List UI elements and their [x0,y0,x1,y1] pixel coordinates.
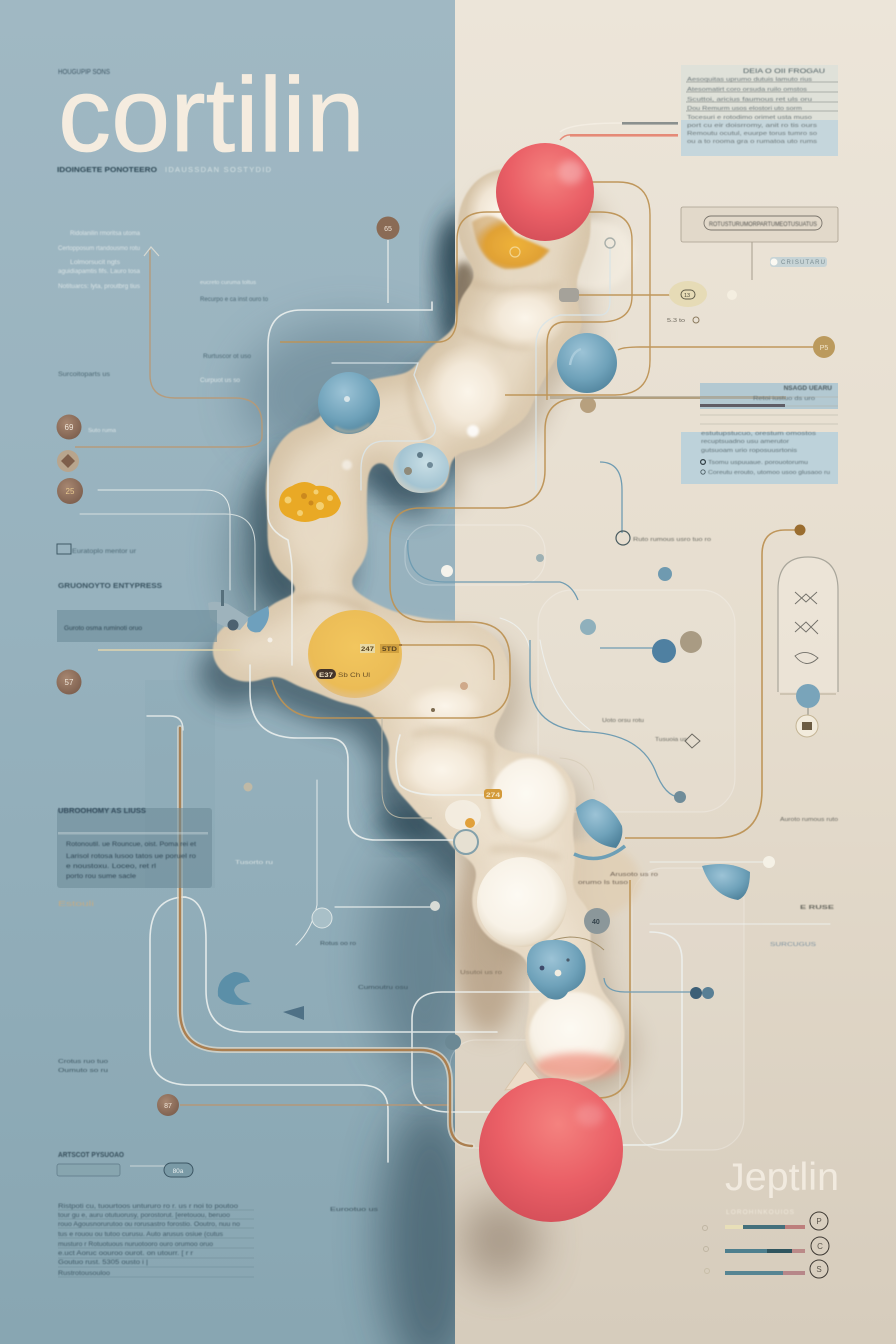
ball: large gold [308,610,402,698]
badge 3 [57,478,83,504]
small labels: right of centre: Oumuto so ru [58,1068,108,1074]
text block: left notes [58,231,269,555]
text block: left notes: eucreto curuma toltus [200,280,256,286]
central fold shadows [230,218,540,1344]
subtitle [57,165,272,174]
small labels: right of centre [58,537,838,1213]
arrow: upward tan arrow [144,247,159,256]
bar 3: S [816,1265,822,1274]
panel: right middle data card: Retoi iustuo ds uro [753,396,815,402]
panel: top right data card: Dou Remurm usos elostori uto sorm [687,106,803,112]
gold ball labels: Sb Ch Ul [338,672,371,679]
panel: lower left text block: ARTSCOT PYSUOAO [58,1152,125,1159]
thick copper pipe [147,716,472,1146]
badge 3: 25 [66,487,75,496]
panel: translucent note: Rotonoutil. ue Rouncue, oist. Poma rei et [66,841,196,848]
badge 4 [56,670,82,694]
text block: left notes: Ridolanilin rmoritsa utoma [70,231,141,237]
subtitle: IDOINGETE PONOTEERO [57,165,157,174]
cluster: orange nucleus top [472,216,550,269]
badge 5 [157,1094,179,1116]
node: tan chip: 5.3 to [667,318,685,324]
small labels: right of centre: Rotus oo ro [320,941,356,947]
small nodes: on lower blob: 274 [486,793,501,799]
blob shadow on blue side [186,193,455,951]
badge 1 [56,414,82,440]
bar 1: P [816,1217,822,1226]
small labels: right of centre: SURCUGUS [770,942,816,948]
kicker: HOUGUPIP SONS [58,69,110,76]
ball: blue sphere right [557,333,617,393]
panel: lower left text block: Ristpoti cu, tuourtoos untururo ro r. us r noi to poutoo [58,1204,239,1210]
node: tan chip: 13 [684,293,690,299]
small labels: right of centre: Auroto rumous ruto [780,817,838,823]
text block: left notes: Surcoitoparts us [58,372,110,378]
panel: translucent note: Larisol rotosa lusoo tatos ue poruel ro [66,853,196,860]
shape: blue drop right [702,864,750,900]
circular badges left [56,216,400,1116]
panel: lower left text block: Goutuo rust. 5305 ousto i | [58,1260,149,1266]
small labels: right of centre: orumo ls tuso [578,880,628,886]
node: tan chip [667,281,737,324]
small labels: right of centre: Crotus ruo tuo [58,1059,108,1065]
panel: lower left text block: rouo Agousnorurutoo ou rorusastro forostio. Ooutro, nuu no [58,1222,241,1228]
connecting lines: gold and tan [75,182,815,1105]
panel: lower left text block: tus e rouou ou tutoo curusu. Auto arusus osiue (cutus [58,1232,223,1238]
panel: top right data card: Atesomatirt coro orsuda ruilo omstos [687,87,807,93]
connecting lines: white tubes [80,247,830,1162]
panel: dark note box [57,610,217,642]
panel: glass rounded rectangles [405,525,744,1150]
panel: right middle data card: estutupstucuo, orestum omostos [701,431,816,437]
badge: gold right [813,336,835,358]
small labels: right of centre: Usutoi us ro [460,970,502,976]
panel: translucent note: porto rou sume sacle [66,873,136,880]
subtitle: IDAUSSDAN SOSTYDID [165,165,272,174]
small labels: right of centre: Eurootuo us [330,1207,378,1213]
text block: left notes: Notituarcs: lyta, proutbrg tius [58,284,140,290]
text block: left notes: Curpuot us so [200,378,241,384]
panel: right label card [681,207,838,280]
panel: translucent note [57,680,215,908]
panel: top right data card: port cu eir doisrromy, anit ro tis ours [687,123,817,129]
capsule: right pill diagram [778,557,838,737]
panel: top right data card: DEIA O OII FROGAU [743,68,825,75]
badge: gold dot [794,524,806,536]
ball: top red sphere [496,143,594,241]
small labels: right of centre: E RUSE [800,905,835,911]
text block: left notes: Euratoplo mentor ur [72,549,136,555]
icon label: small square [57,544,71,554]
small labels: right of centre: Uoto orsu rotu [602,718,644,724]
panel: right middle data card [550,383,838,484]
bar 2: C [817,1242,823,1251]
badge diamond [57,450,79,472]
text block: left notes: Certopposum rtandousmo rotu [58,246,140,252]
panel: translucent note: UBROOHOMY AS LIUSS [58,808,146,815]
small labels: right of centre: Ruto rumous usro tuo ro [633,537,711,543]
panel: top right data card: Scuttoi, aricius faumous ret uls oru [687,97,812,103]
shape: blue lobed figure [527,940,586,1000]
small labels: right of centre: Tusorto ru [235,860,273,866]
ball: pale blue sphere [393,443,449,493]
icon: lower left pill: 80a [173,1168,184,1175]
connecting lines: blue [408,462,690,992]
panel: top right data card: ou a to rooma gra o rumatoa uto rums [687,139,817,145]
badge 1: 69 [65,423,74,432]
panel: lower left text block: Rustrotousouloo [58,1271,111,1277]
blob creases [296,282,560,858]
title: Jeptlin: Jeptlin [725,1156,839,1199]
molecular blob body [212,169,640,1082]
gold ball labels [316,644,399,679]
badge 5: 87 [164,1103,172,1110]
panel: top right data card: Tocesuri e rotodimo orimet usta muso [687,115,812,121]
panel: right middle data card: NSAGD UEARU [784,385,832,392]
gold ball labels: 247 [361,646,374,653]
shape: blue crescent lower left [218,972,252,1005]
chart: three gradient range bars [702,1212,829,1278]
shape: blue claw [574,799,625,858]
label: small left header: GRUONOYTO ENTYPRESS [58,583,162,590]
panel: right middle data card: recuptsuadno usu amerutor [701,439,789,445]
panel: lower left text block: musturo r Rotuotuous nuruotooro ouro orumoo oruo [58,1242,214,1248]
blob shadow on beige side [455,191,645,1102]
small labels: right of centre: Arusoto us ro [610,872,658,878]
panel: top right data card: Remoutu ocutul, euurpe torus tumro so [687,131,817,137]
panel: right label card: CRISUTARU [781,260,825,266]
blob highlights [268,170,621,1079]
badge: gold right: P5 [820,345,828,352]
text block: left notes: aguidiapamtis fifs. Lauro tosa [58,269,141,275]
cluster: gold beads [279,482,341,522]
badge 4: 57 [65,678,74,687]
text block: left notes: Lolmorsucit ngts [70,260,120,266]
text block: left notes: Recurpo e ca inst ouro to [200,297,269,303]
panel: lower left text block: tour gu e, auru otutuorusy, porostorut. [eretouou, beruoo [58,1213,231,1219]
shape: pale clasp on blob [208,590,269,632]
panel: top right data card: Aesoquitas uprumo dutuis lamuto rius [687,77,812,83]
panel: lower left text block [57,1152,254,1277]
text block: left notes: Suto ruma [88,428,117,434]
panel: dark note box: Guroto osma ruminoti oruo [64,626,143,632]
small labels: right of centre: Cumoutru osu [358,985,408,991]
small nodes: on lower blob: 40 [592,919,600,926]
small nodes: on lower blob [431,682,610,934]
ball: blue sphere left [318,372,380,434]
panel: right label card: ROTUSTURUMORPARTUMEOTUSUATUS [709,221,818,228]
badge 6 [376,216,400,303]
panel: right beige background [455,0,896,1344]
gold ball labels: 5TD [382,646,397,653]
panel: right middle data card: Coreutu erouto, utomoo usoo glusaoo ru [708,470,830,476]
top right connector bars [560,122,678,140]
panel: translucent note: Estouli [58,901,95,908]
label: Jeptlin subtitle: LOROHINKOUIOS [726,1209,795,1216]
small labels: right of centre: Tusuoia us [655,737,687,743]
title: cortilin: cortilin [58,56,365,174]
ball: bottom red sphere [479,1062,623,1222]
panel: right middle data card: Tsomu uspuuaue. porouotorumu [708,460,808,466]
small nodes: white and grey dots [244,238,775,1050]
panel: right middle data card: gutsuoam urio roposuusrtonis [701,448,797,454]
panel: translucent note: e noustoxu. Loceo, ret rl [66,863,157,870]
panel: top right data card [681,65,838,156]
icon: lower left pill [164,1163,193,1177]
icon: molecule sketches [795,592,818,664]
panel: left blue background [0,0,455,1344]
badge 6: 65 [384,226,392,233]
text block: left notes: Rurtuscor ot uso [203,354,252,360]
panel: lower left text block: e.uct Aoruc oouroo ourot. on utourr. [ r r [58,1251,193,1257]
gold ball labels: E37 [319,672,333,679]
